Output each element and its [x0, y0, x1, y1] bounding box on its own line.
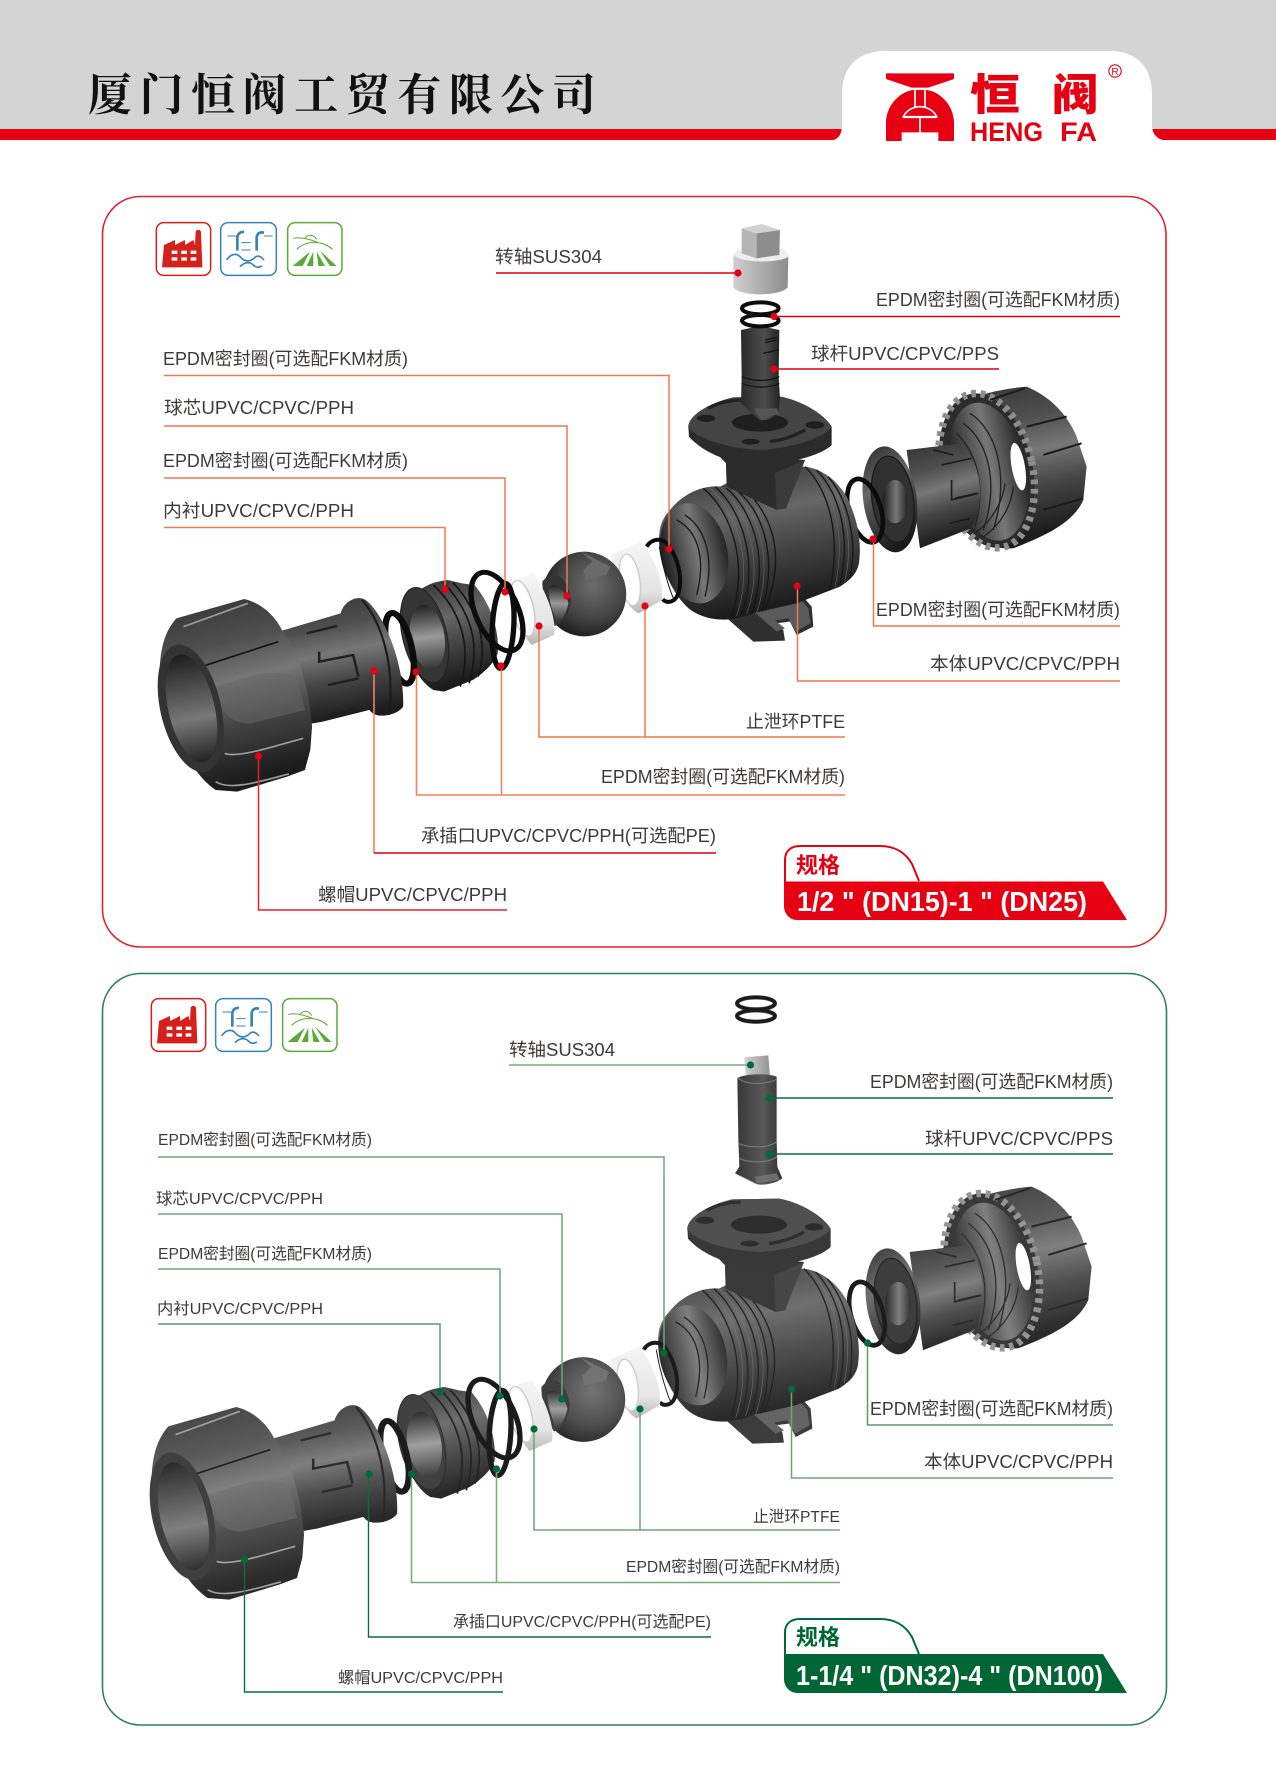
callout: seal to body: EPDM密封圈(可选配FKM材质) [163, 349, 408, 369]
callout: shaft [509, 1040, 754, 1069]
callout: seal lower: EPDM密封圈(可选配FKM材质) [601, 767, 845, 787]
callout: PTFE ring [535, 602, 845, 737]
callout: ball [156, 1190, 566, 1403]
callout: seal lower [408, 1465, 840, 1582]
callout: stem: 球杆UPVC/CPVC/PPS [811, 344, 999, 364]
callout: nut: 螺帽UPVC/CPVC/PPH [318, 885, 507, 905]
callout: PTFE ring [530, 1405, 840, 1530]
icon: water [221, 223, 276, 275]
callout: seal to body [163, 349, 673, 553]
callout: shaft [495, 247, 742, 277]
callout: seal to body: EPDM密封圈(可选配FKM材质) [158, 1131, 372, 1149]
logo chinese text [970, 61, 1098, 123]
logo [886, 61, 1121, 147]
icons: application row [151, 999, 337, 1051]
icon: agriculture [288, 223, 342, 275]
panel frame [102, 974, 1166, 1725]
header background [0, 0, 1276, 141]
logo latin text: FA [1060, 117, 1097, 147]
callout: seal to ring: EPDM密封圈(可选配FKM材质) [163, 451, 408, 471]
callout: seal to body [158, 1131, 668, 1357]
callout: right seal: EPDM密封圈(可选配FKM材质) [876, 600, 1120, 620]
callout: right seal [864, 1339, 1113, 1425]
logo chinese text: 阀 [1052, 61, 1098, 123]
logo latin text [970, 117, 1097, 147]
spec badge [784, 846, 1127, 920]
callout: ball [164, 398, 571, 600]
callout: right seal [869, 535, 1120, 626]
callout: stem: 球杆UPVC/CPVC/PPS [925, 1129, 1113, 1149]
callout: PTFE ring: 止泄环PTFE [746, 712, 845, 732]
callout: shaft: 转轴SUS304 [495, 247, 602, 267]
icon: water [216, 999, 271, 1051]
callout: socket [365, 1470, 711, 1637]
icon: logo mark [886, 73, 954, 141]
logo latin text: HENG [970, 117, 1043, 147]
icon: factory [151, 999, 206, 1051]
callout: socket: 承插口UPVC/CPVC/PPH(可选配PE) [453, 1613, 711, 1631]
callout: top seal [770, 290, 1120, 320]
callout: seal to ring [158, 1245, 504, 1400]
panel: bottom valve 1-1/4"-4" [102, 974, 1166, 1725]
panel frame [102, 196, 1166, 947]
callout: nut: 螺帽UPVC/CPVC/PPH [338, 1669, 503, 1687]
callout: body [793, 582, 1120, 681]
callout: body: 本体UPVC/CPVC/PPH [930, 654, 1120, 674]
icon: factory [156, 223, 211, 275]
callout: nut [255, 752, 507, 910]
callout: lining: 内衬UPVC/CPVC/PPH [157, 1300, 323, 1318]
callout: stem [765, 1129, 1113, 1158]
callout: seal lower [412, 662, 845, 795]
registered mark [1109, 65, 1121, 78]
callout: body [788, 1385, 1113, 1478]
callout: PTFE ring: 止泄环PTFE [753, 1508, 840, 1526]
callout: top seal [765, 1072, 1113, 1102]
callout: lining [157, 1300, 444, 1396]
valve exploded view [139, 997, 1092, 1600]
callout: right seal: EPDM密封圈(可选配FKM材质) [870, 1399, 1113, 1419]
valve exploded view [147, 224, 1087, 792]
logo chinese text: 恒 [970, 61, 1020, 123]
valve stem with o-rings [735, 997, 782, 1185]
title: company name: 厦门恒阀工贸有限公司 [88, 71, 596, 120]
callout: top seal: EPDM密封圈(可选配FKM材质) [876, 290, 1120, 310]
callout: socket: 承插口UPVC/CPVC/PPH(可选配PE) [421, 826, 716, 846]
callout: nut [241, 1555, 503, 1692]
callout: ball: 球芯UPVC/CPVC/PPH [156, 1190, 323, 1208]
callout: seal lower: EPDM密封圈(可选配FKM材质) [626, 1558, 840, 1576]
registered mark: R [1111, 67, 1119, 78]
callout: top seal: EPDM密封圈(可选配FKM材质) [870, 1072, 1113, 1092]
spec badge [784, 1619, 1127, 1693]
callout: socket [370, 667, 716, 853]
callout: body: 本体UPVC/CPVC/PPH [924, 1452, 1113, 1472]
panel: top valve 1/2"-1" [102, 196, 1166, 947]
callout: shaft: 转轴SUS304 [509, 1040, 615, 1060]
spec badge: 规格 [796, 1625, 840, 1650]
callout: lining: 内衬UPVC/CPVC/PPH [163, 501, 354, 521]
callout: lining [163, 501, 449, 593]
callout: seal to ring: EPDM密封圈(可选配FKM材质) [158, 1245, 372, 1263]
spec badge: 规格 [796, 853, 840, 878]
spec badge: 1-1/4 " (DN32)-4 " (DN100) [796, 1660, 1103, 1691]
icons: application row [156, 223, 342, 275]
callout: ball: 球芯UPVC/CPVC/PPH [164, 398, 354, 418]
callout: stem [770, 344, 999, 373]
callout: seal to ring [163, 451, 509, 596]
spec badge: 1/2 " (DN15)-1 " (DN25) [797, 886, 1087, 917]
valve stem with cap and o-rings [733, 224, 788, 420]
icon: agriculture [283, 999, 337, 1051]
